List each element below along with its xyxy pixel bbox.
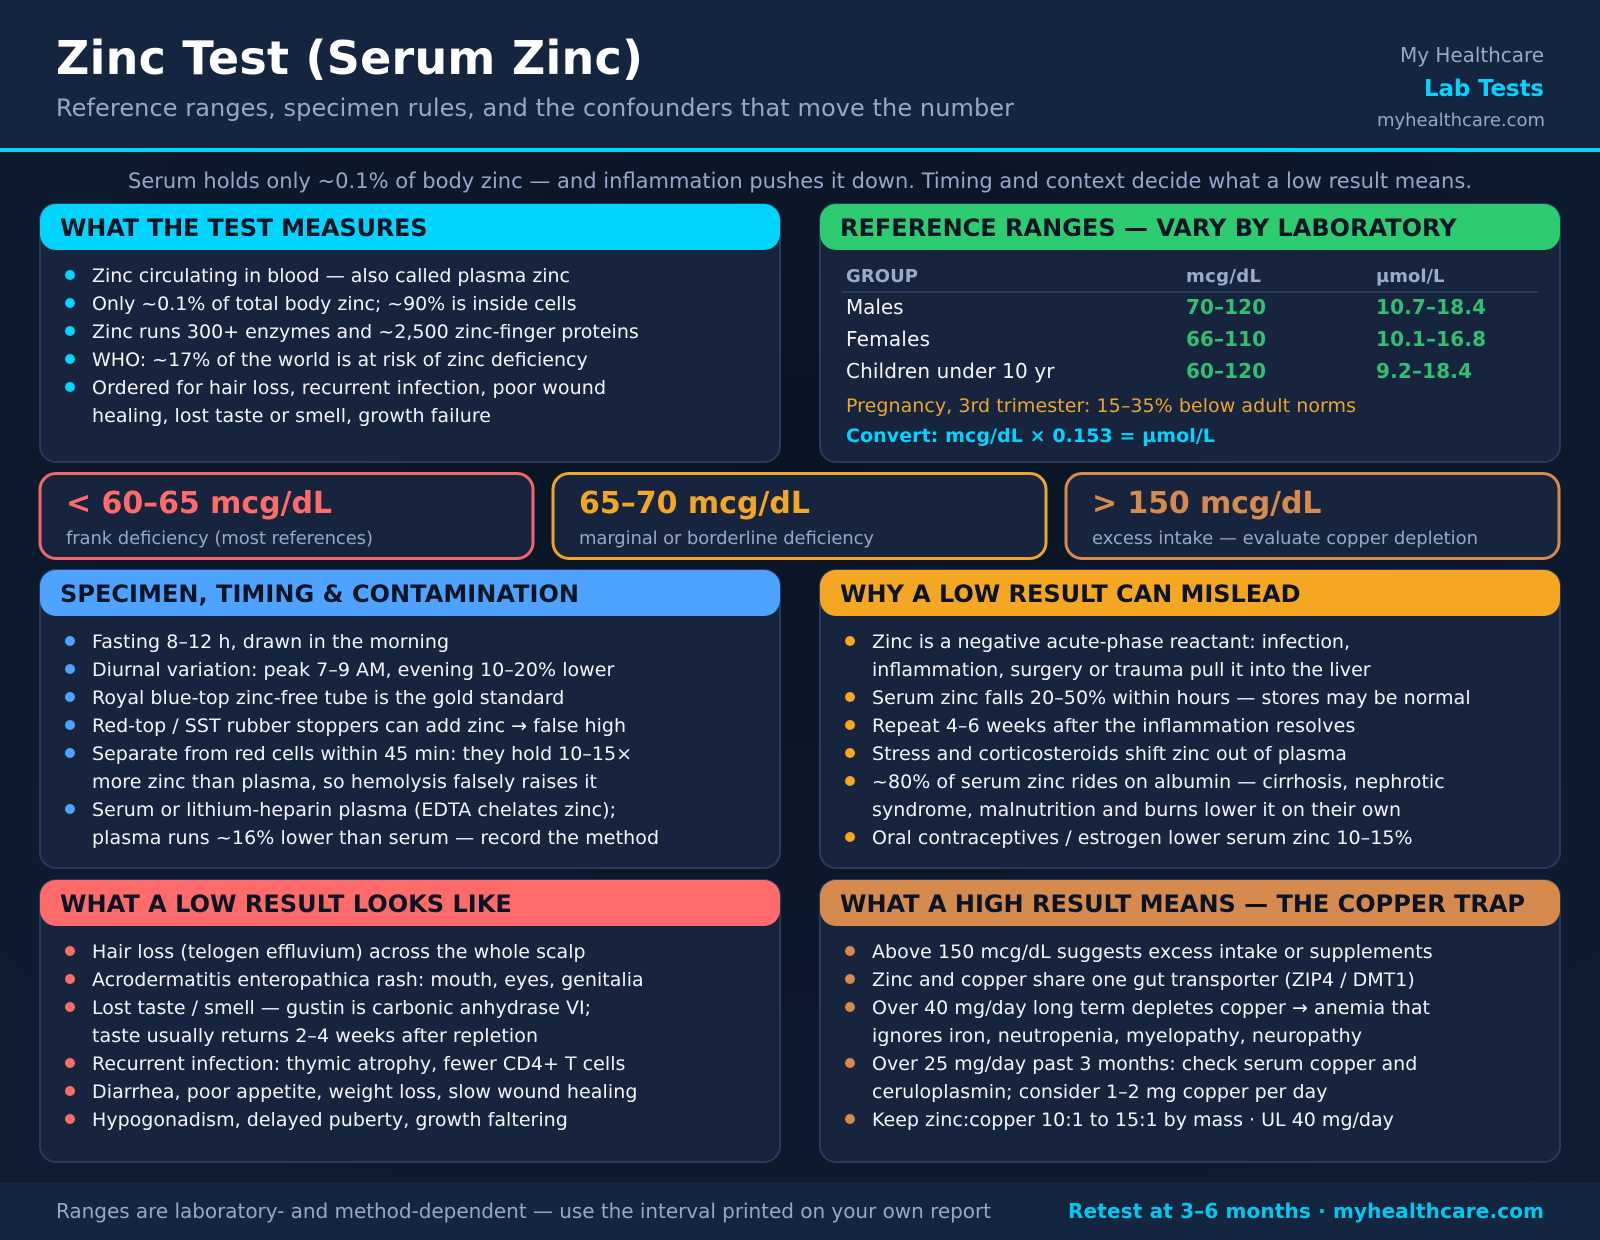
subtitle: Reference ranges, specimen rules, and the confounders that move the number	[56, 94, 1014, 122]
stat card: deficiency	[40, 474, 533, 558]
bullet list: what the test measures: Zinc runs 300+ enzymes and ~2,500 zinc-finger proteins	[92, 321, 639, 343]
heading: reference ranges	[820, 204, 1560, 250]
panel: what a high result means	[820, 880, 1560, 1162]
bullet list: what the test measures: Zinc circulating in blood — also called plasma zinc	[92, 265, 570, 287]
heading: low result	[40, 880, 780, 926]
bullet list: specimen: Separate from red cells within 45 min: they hold 10–15×	[92, 743, 632, 765]
stat card: excess: > 150 mcg/dL	[1092, 486, 1322, 521]
bullet list: high result: Above 150 mcg/dL suggests excess intake or supplements	[872, 941, 1433, 963]
brand block: Lab Tests	[1424, 76, 1544, 102]
bullet list: mislead: Zinc is a negative acute-phase reactant: infection,	[872, 631, 1350, 653]
bullet list: low result	[65, 941, 644, 1131]
stat card: borderline: marginal or borderline deficiency	[579, 528, 874, 549]
table: reference ranges: GROUP	[846, 266, 918, 287]
table: reference ranges: mcg/dL	[1186, 266, 1261, 287]
brand block: My Healthcare	[1400, 43, 1544, 67]
heading: high result	[820, 880, 1560, 926]
bullet list: high result: Keep zinc:copper 10:1 to 15:1 by mass · UL 40 mg/day	[872, 1109, 1394, 1131]
panel: reference ranges	[820, 204, 1560, 462]
table: reference ranges: µmol/L	[1376, 266, 1444, 287]
bullet list: mislead: ~80% of serum zinc rides on albumin — cirrhosis, nephrotic	[872, 771, 1445, 793]
bullet list: what the test measures: Only ~0.1% of total body zinc; ~90% is inside cells	[92, 293, 576, 315]
bullet list: low result: Diarrhea, poor appetite, weight loss, slow wound healing	[92, 1081, 637, 1103]
heading: what the test measures: WHAT THE TEST MEASURES	[60, 214, 428, 242]
pregnancy note: Pregnancy, 3rd trimester: 15–35% below adult norms	[846, 395, 1356, 417]
table: reference ranges: 60–120	[1186, 359, 1266, 383]
table: reference ranges: Children under 10 yr	[846, 359, 1055, 383]
bullet list: low result: Hypogonadism, delayed puberty, growth faltering	[92, 1109, 568, 1131]
heading: specimen	[40, 570, 780, 616]
bullet list: high result: Over 40 mg/day long term depletes copper → anemia that	[872, 997, 1430, 1019]
stat card: borderline: 65–70 mcg/dL	[579, 486, 810, 521]
bullet list: mislead	[845, 631, 1471, 849]
panel: why a low result can mislead	[820, 570, 1560, 868]
stat card: deficiency: < 60–65 mcg/dL	[66, 486, 332, 521]
table: reference ranges: 70–120	[1186, 295, 1266, 319]
panel: what the test measures	[40, 204, 780, 462]
bullet list: what the test measures: healing, lost taste or smell, growth failure	[92, 405, 491, 427]
table: reference ranges	[842, 266, 1538, 383]
table: reference ranges: 10.1–16.8	[1376, 327, 1486, 351]
heading: why a low result can mislead	[820, 570, 1560, 616]
bullet list: low result: Hair loss (telogen effluvium) across the whole scalp	[92, 941, 586, 963]
stat card: excess	[1066, 474, 1559, 558]
bullet list: specimen: Royal blue-top zinc-free tube is the gold standard	[92, 687, 564, 709]
title: Zinc Test (Serum Zinc)	[56, 31, 643, 85]
bullet list: what the test measures	[65, 265, 639, 427]
bullet list: specimen	[65, 631, 659, 849]
heading: what the test measures	[40, 204, 780, 250]
table: reference ranges: 66–110	[1186, 327, 1266, 351]
bullet list: what the test measures: Ordered for hair loss, recurrent infection, poor wound	[92, 377, 606, 399]
footer band: Ranges are laboratory- and method-dependent — use the interval printed on your own report	[56, 1199, 991, 1223]
bullet list: mislead: Serum zinc falls 20–50% within hours — stores may be normal	[872, 687, 1471, 709]
bullet list: mislead: Repeat 4–6 weeks after the inflammation resolves	[872, 715, 1355, 737]
stat card: excess: excess intake — evaluate copper depletion	[1092, 528, 1478, 549]
bullet list: specimen: Serum or lithium-heparin plasma (EDTA chelates zinc);	[92, 799, 616, 821]
panel: specimen, timing and contamination	[40, 570, 780, 868]
footer band	[0, 1182, 1600, 1240]
bullet list: mislead: Oral contraceptives / estrogen lower serum zinc 10–15%	[872, 827, 1412, 849]
table: reference ranges: Males	[846, 295, 904, 319]
heading: reference ranges: REFERENCE RANGES — VARY BY LABORATORY	[840, 214, 1457, 242]
footer band: Retest at 3–6 months · myhealthcare.com	[1068, 1199, 1544, 1223]
bullet list: low result: taste usually returns 2–4 weeks after repletion	[92, 1025, 538, 1047]
bullet list: specimen: Fasting 8–12 h, drawn in the morning	[92, 631, 449, 653]
header band	[0, 0, 1600, 152]
bullet list: mislead: syndrome, malnutrition and burns lower it on their own	[872, 799, 1401, 821]
bullet list: high result: Zinc and copper share one gut transporter (ZIP4 / DMT1)	[872, 969, 1415, 991]
bullet list: specimen: Diurnal variation: peak 7–9 AM, evening 10–20% lower	[92, 659, 614, 681]
bullet list: high result	[845, 941, 1433, 1131]
heading: low result: WHAT A LOW RESULT LOOKS LIKE	[60, 890, 512, 918]
bullet list: mislead: Stress and corticosteroids shift zinc out of plasma	[872, 743, 1347, 765]
stat card: deficiency: frank deficiency (most references)	[66, 528, 373, 549]
brand block	[1377, 43, 1545, 131]
intro sentence: Serum holds only ~0.1% of body zinc — and inflammation pushes it down. Timing and context decide what a low result means.	[128, 169, 1472, 193]
bullet list: high result: ceruloplasmin; consider 1–2 mg copper per day	[872, 1081, 1328, 1103]
heading: why a low result can mislead: WHY A LOW RESULT CAN MISLEAD	[840, 580, 1301, 608]
table: reference ranges: 10.7–18.4	[1376, 295, 1486, 319]
conversion formula: Convert: mcg/dL × 0.153 = µmol/L	[846, 425, 1215, 447]
bullet list: low result: Acrodermatitis enteropathica rash: mouth, eyes, genitalia	[92, 969, 644, 991]
table: reference ranges: 9.2–18.4	[1376, 359, 1472, 383]
bullet list: mislead: inflammation, surgery or trauma pull it into the liver	[872, 659, 1371, 681]
heading: specimen: SPECIMEN, TIMING & CONTAMINATION	[60, 580, 579, 608]
stat card: borderline	[553, 474, 1046, 558]
bullet list: what the test measures: WHO: ~17% of the world is at risk of zinc deficiency	[92, 349, 588, 371]
panel: what a low result looks like	[40, 880, 780, 1162]
bullet list: specimen: Red-top / SST rubber stoppers can add zinc → false high	[92, 715, 626, 737]
bullet list: specimen: plasma runs ~16% lower than serum — record the method	[92, 827, 659, 849]
bullet list: specimen: more zinc than plasma, so hemolysis falsely raises it	[92, 771, 597, 793]
bullet list: low result: Recurrent infection: thymic atrophy, fewer CD4+ T cells	[92, 1053, 625, 1075]
brand block: myhealthcare.com	[1377, 110, 1545, 131]
bullet list: high result: Over 25 mg/day past 3 months: check serum copper and	[872, 1053, 1417, 1075]
bullet list: high result: ignores iron, neutropenia, myelopathy, neuropathy	[872, 1025, 1362, 1047]
heading: high result: WHAT A HIGH RESULT MEANS — THE COPPER TRAP	[840, 890, 1525, 918]
table: reference ranges: Females	[846, 327, 930, 351]
bullet list: low result: Lost taste / smell — gustin is carbonic anhydrase VI;	[92, 997, 591, 1019]
